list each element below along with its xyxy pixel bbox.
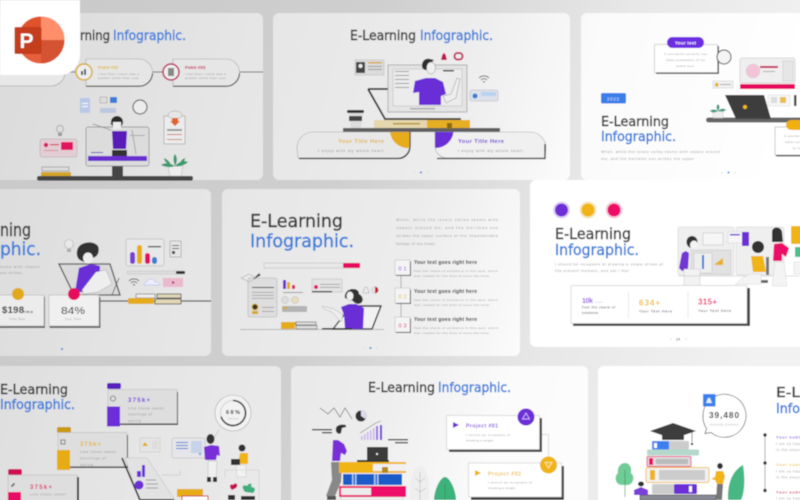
bar chart panel [126, 239, 164, 266]
stat card: Feel the charm of [582, 306, 615, 310]
profile card [355, 60, 384, 75]
illustration: woman with laptop [322, 289, 381, 329]
project card 2 [468, 463, 564, 500]
stat card: $198 [0, 288, 45, 328]
illustration: graduation cap [650, 423, 696, 445]
heading: slide 7: E-Learning [0, 383, 68, 398]
heading: slide 5 [250, 211, 354, 252]
timeline entries: Your subt [776, 462, 800, 467]
progress bar [264, 263, 360, 268]
heading: slide 4 [0, 220, 41, 260]
icon: point 2 badge [76, 64, 92, 80]
pie chart [356, 410, 366, 422]
stat card: 84%: 84% [61, 305, 85, 317]
point 2 card: greater artist than now. [98, 76, 139, 80]
chart: 68% ring: 68% [226, 410, 240, 416]
icon: purple project badge [518, 408, 534, 426]
stat card: purple: Like those sweet [128, 406, 165, 410]
heading: slide 9: Info [776, 402, 800, 417]
panel: slide 2 [273, 13, 570, 180]
body text: When, while the lovely valley teems with [396, 218, 499, 222]
plants [228, 483, 255, 500]
step 02: Feel the charm of existence in this spot, which [414, 298, 498, 302]
body text: eems with vapour [0, 265, 41, 269]
point 3 card: greater artist than now. [185, 76, 226, 80]
chat panel [768, 95, 796, 106]
heading: slide 8 [368, 381, 511, 396]
panel: slide 7 [0, 366, 281, 500]
chart: 68% ring: Value [228, 416, 238, 420]
stat card: $198: Title Text [8, 317, 26, 321]
body text: foliage of my trees. [396, 242, 436, 246]
panel: slide 9 [598, 366, 800, 500]
page number [670, 338, 687, 342]
text box with purple button: taken possession of my [666, 58, 705, 62]
growth bars [360, 421, 382, 440]
heading: slide 4: ning [0, 220, 31, 241]
desk outlines [225, 470, 259, 500]
step 01: Feel the charm of existence in this spot, which [414, 269, 498, 273]
heading: slide 2: Infographic. [420, 29, 493, 44]
stat card: gold: Like those sweet [80, 450, 117, 454]
right text box: A wonder [784, 134, 800, 138]
timeline entries: in the exqui [776, 476, 800, 480]
point 2 card: Point #02 [98, 65, 119, 70]
right title card: I enjoy with my whole heart. [458, 149, 524, 153]
timeline entries: I am so hap [776, 442, 800, 446]
stat card: gold: mornings of [80, 456, 107, 460]
laptop [357, 447, 389, 462]
stat card: 315+ [698, 298, 717, 306]
heading: slide 1: Infographic. [113, 29, 186, 44]
text box with purple button [654, 37, 719, 74]
heading: slide 6: Infographic. [555, 241, 639, 259]
left title card [297, 132, 410, 158]
timeline entries: I am so hap [776, 470, 800, 474]
panel: slide 5 [222, 189, 520, 356]
step 01: Your text goes right here [414, 260, 477, 266]
icon: wifi [479, 76, 489, 82]
stat card: 84% [49, 288, 100, 328]
left title card: Your Title Here [338, 139, 385, 145]
illustration: man with laptop [231, 444, 248, 477]
stat card: 84%: Sub Text [65, 317, 82, 321]
chart: 68% ring [213, 395, 251, 440]
timeline [763, 433, 767, 492]
illustration: man pointing [711, 463, 725, 500]
body text [555, 262, 664, 273]
mini profile card [470, 90, 498, 101]
heading: slide 8: Infographic. [438, 381, 511, 396]
stat card [571, 286, 750, 326]
baseline [100, 300, 211, 302]
heading: slide 3 [601, 114, 676, 145]
illustration: person on laptop [59, 242, 120, 295]
project card 1: Project #01 [466, 424, 498, 430]
step 03 [395, 317, 498, 335]
body text: vapour around me, and the meridian sun [396, 226, 499, 230]
illustration: books [41, 167, 71, 176]
line chart zigzag [320, 408, 352, 419]
icon: point 3 badge [163, 64, 179, 80]
illustration: woman at monitor [37, 116, 193, 180]
page number: 14 [676, 338, 680, 342]
project card 2: Project #02 [488, 472, 521, 478]
project card 2: I should be incapable of [488, 480, 533, 484]
heading: slide 4: phic. [0, 239, 41, 260]
small note [713, 81, 733, 88]
body text [0, 265, 41, 275]
card with flag [140, 438, 160, 452]
stat card: pink: Like those sweet [30, 492, 67, 496]
stat card: purple: spring [128, 419, 141, 423]
body text: sun strikes. [0, 271, 23, 275]
step 02: was created for the bliss of souls like mine. [414, 303, 490, 307]
progress bar [127, 271, 185, 274]
step 02 [395, 288, 498, 307]
stat card: Users [595, 300, 604, 304]
body text: strikes the upper surface of the impenetrable [396, 234, 499, 238]
stat card: gold [57, 427, 128, 470]
body text: When, while the lovely valley teems with vapour around [601, 150, 720, 154]
illustration: large leaf [728, 465, 744, 500]
icon: cloud download document [164, 111, 185, 144]
panel: slide 6 [530, 180, 800, 347]
heading: slide 6 [555, 225, 639, 259]
bubble stat: Activity Control [710, 422, 738, 426]
project card 1 [446, 416, 542, 452]
text box with purple button: entire soul. [676, 64, 695, 68]
step 03: Feel the charm of existence in this spot, which [414, 326, 498, 330]
icon: cloud [144, 279, 160, 285]
icon: PowerPoint logo: P [20, 30, 34, 53]
body text [601, 150, 720, 161]
body text [396, 218, 499, 246]
heading: slide 5: E-Learning [250, 211, 343, 232]
bubble stat [703, 394, 746, 437]
panel: slide 8 [291, 366, 588, 500]
left title card: I enjoy with my whole heart. [318, 149, 385, 153]
step 03: Your text goes right here [414, 317, 477, 323]
heading: slide 7 [0, 383, 75, 413]
dark line labels [312, 429, 408, 443]
icon: coffee cup [347, 110, 364, 128]
icon: light bulb [56, 126, 64, 136]
year badge: 2023 [607, 96, 619, 102]
heading: slide 3: Infographic. [601, 129, 676, 145]
project card 1: I should be incapable of [466, 433, 511, 437]
icon row [553, 202, 622, 218]
heading: slide 3: E-Learning [601, 114, 669, 130]
pagination dots [721, 172, 736, 174]
desk [343, 128, 500, 132]
icon: wifi [129, 279, 139, 285]
icons: bell and dial [363, 287, 378, 293]
panel: slide 1 points [0, 13, 263, 180]
timeline entries: in the exqui [776, 448, 800, 452]
illustration: teacher on laptop [368, 59, 467, 119]
dashboard panel [172, 438, 205, 458]
body text: I should be incapable of drawing a single stroke at [555, 262, 664, 266]
icon: gold project badge [540, 456, 557, 474]
timeline entries [776, 434, 800, 500]
right text box: gre [793, 146, 800, 150]
illustration: profile panel [740, 58, 795, 89]
step 03: 03 [398, 324, 406, 330]
icon: clock [133, 100, 147, 114]
stat card: gold: 375k+ [80, 442, 101, 448]
illustration: laptop on desk [706, 95, 800, 122]
connector [540, 434, 548, 458]
illustration: student with laptop [634, 482, 648, 495]
icon: chat bubble [454, 53, 462, 60]
stat card: 634+ [639, 298, 660, 308]
stat card: Your Text Here [698, 309, 731, 313]
step 01: was created for the bliss of souls like mine. [414, 274, 490, 278]
point 2 card: I feel that I never was a [98, 72, 139, 76]
illustration: book [374, 120, 470, 128]
body text: me, and the meridian sun strikes the upper [601, 157, 695, 161]
baseline [240, 328, 384, 330]
heading: slide 7: Infographic. [0, 398, 75, 413]
illustration: plant [161, 154, 188, 176]
timeline entries: Your subt [776, 434, 800, 440]
illustration: plant [710, 104, 726, 118]
heading: slide 2 [350, 29, 493, 44]
document icon [170, 241, 181, 257]
book stack [339, 462, 406, 500]
heading: slide 2: E-Learning [350, 29, 416, 44]
illustration: woman presenting [204, 434, 220, 482]
illustration: team at boards [678, 226, 800, 286]
heading: slide 5: Infographic. [250, 231, 354, 252]
illustration: green tree [434, 477, 456, 500]
icon: document [80, 98, 90, 113]
icon: light bulb [64, 240, 74, 252]
text box with purple button: Your text [675, 40, 696, 46]
right text box: taken po [785, 140, 800, 144]
panel: slide 3 [581, 13, 800, 180]
right title card [435, 132, 546, 158]
year badge [601, 93, 626, 104]
timeline line [60, 71, 263, 73]
video card [163, 278, 183, 287]
illustration: certificate [241, 274, 277, 317]
pagination dots [363, 347, 378, 349]
point 3 card: I feel that I never was a [185, 72, 226, 76]
books [128, 294, 181, 304]
stat card: $198: /mo [24, 309, 34, 314]
pagination dots [413, 172, 429, 174]
step 02: 02 [398, 294, 406, 300]
mini bar chart [283, 280, 303, 293]
illustration: white tree [410, 466, 429, 500]
stat card: gold: spring [80, 463, 93, 467]
timeline entries: Your subt [776, 490, 800, 494]
heading: slide 9: E-L [776, 386, 800, 401]
step 01: 01 [398, 266, 406, 272]
stat card: 10k [582, 298, 593, 305]
icon: bell [441, 53, 447, 60]
step 02: Your text goes right here [414, 289, 477, 295]
heading: slide 9 [776, 386, 800, 417]
book stack [640, 441, 716, 500]
right title card: Your Title Here [458, 139, 505, 145]
heading: slide 1 [80, 29, 186, 44]
PowerPoint badge [0, 0, 80, 75]
heading: slide 1: rning [80, 29, 110, 44]
body text: the present moment, and yet I feel [555, 269, 629, 273]
numbered steps [395, 260, 498, 335]
heading: slide 6: E-Learning [555, 225, 631, 243]
heading: slide 8: E-Learning [368, 381, 435, 396]
stat card: existence [582, 311, 598, 315]
icon: clock [717, 50, 731, 64]
point 3 card [173, 59, 240, 86]
stat card: pink: 375k+ [30, 485, 52, 491]
info card [312, 279, 342, 292]
project card 1: drawing a single [466, 438, 493, 442]
illustration: tablet [122, 458, 180, 500]
step 03: was created for the bliss of souls like mine. [414, 331, 490, 335]
pagination dots [55, 348, 70, 350]
stat card: $198: $198 [2, 305, 24, 316]
illustration: pink card [40, 139, 77, 157]
small dials [282, 296, 307, 312]
panel: slide 4 [0, 189, 211, 356]
stat card: purple: mornings of [128, 412, 153, 416]
stat card: purple: 375k+ [128, 398, 150, 404]
illustration: gold box and pink flag [177, 489, 208, 500]
stat card: pink [8, 469, 79, 500]
books [281, 322, 317, 329]
point 2 card [86, 59, 152, 86]
point 3 card: Point #03 [185, 65, 206, 70]
project card 2: drawing a single [488, 486, 515, 490]
stat card: purple [107, 383, 178, 426]
icon: small tiles [100, 97, 117, 113]
bubble stat: 39,480 [709, 411, 739, 420]
step 01 [395, 260, 498, 278]
stat card: Your Text Here [639, 310, 672, 314]
text box with purple button: A wonderful serenity has [664, 52, 707, 56]
illustration: person on books [326, 425, 347, 500]
illustration: green tree [616, 463, 633, 497]
right text box [775, 120, 800, 156]
point 1 pill [0, 59, 65, 86]
